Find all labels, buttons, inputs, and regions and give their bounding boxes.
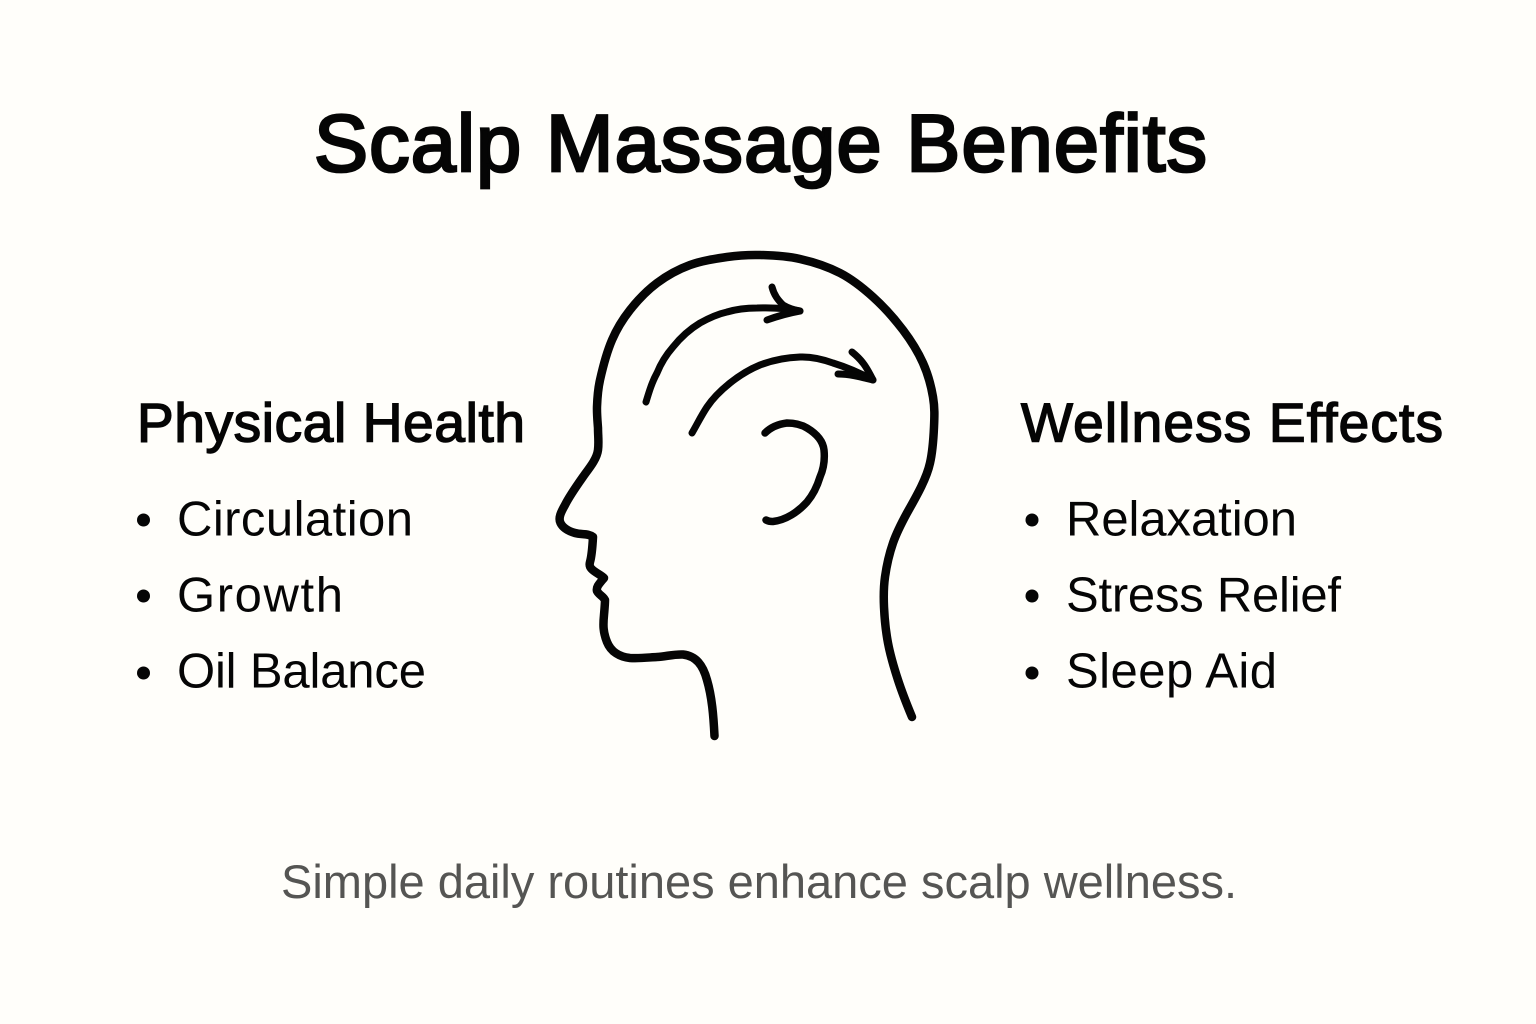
list item: oil balance: Oil Balance — [177, 644, 426, 698]
heading: physical health: Physical Health — [137, 392, 525, 454]
heading: wellness effects: Wellness Effects — [1021, 392, 1443, 454]
list item: relaxation: Relaxation — [1066, 492, 1297, 546]
list item: growth: Growth — [177, 568, 343, 622]
title: Scalp Massage Benefits — [314, 99, 1207, 189]
list item: sleep aid: Sleep Aid — [1066, 644, 1277, 698]
arrow: upper scalp — [646, 287, 800, 402]
footer caption: Simple daily routines enhance scalp wellness. — [281, 855, 1237, 908]
head outline — [560, 255, 934, 736]
ear — [765, 423, 824, 522]
arrow: lower scalp — [692, 352, 873, 433]
list item: circulation: Circulation — [177, 492, 413, 546]
panel: wellness effects — [1021, 392, 1443, 698]
icon: head profile with massage arrows — [560, 255, 934, 736]
list item: stress relief: Stress Relief — [1066, 568, 1341, 622]
panel: physical health — [137, 392, 525, 698]
